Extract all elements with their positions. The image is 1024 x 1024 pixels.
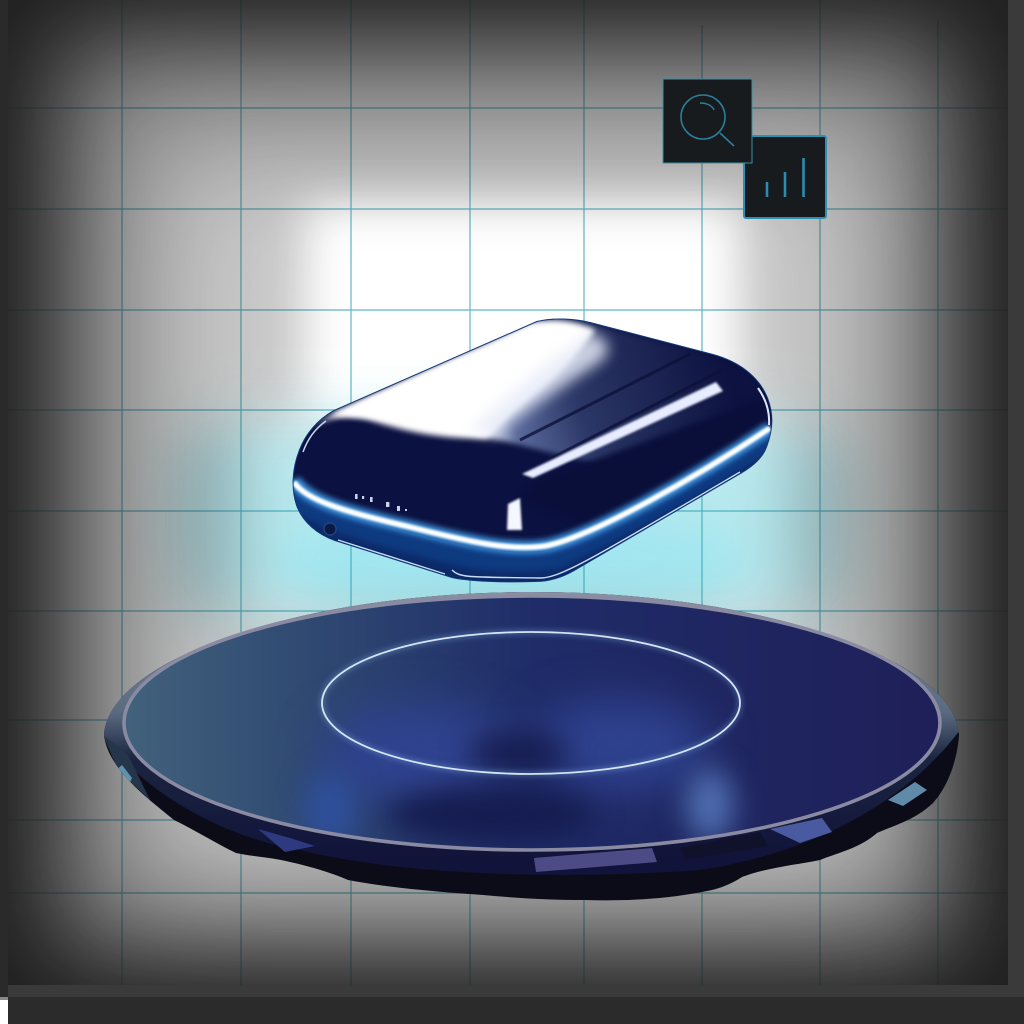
icon: bar chart tile: [744, 136, 826, 218]
soft reflection falloff: [470, 332, 608, 436]
glowing seam: [294, 428, 770, 547]
dark recess: [584, 398, 768, 474]
glowing seam glow: [294, 428, 770, 547]
body shading: [285, 315, 780, 585]
left edge highlight: [303, 421, 326, 452]
disc rim and underside: [100, 585, 965, 905]
platform disc: [100, 585, 965, 905]
floating device: [285, 315, 780, 590]
side specular highlight: [507, 498, 522, 530]
icon: magnifying glass tile: [663, 79, 752, 163]
top light bar: [522, 382, 723, 478]
disc lip highlight: [124, 596, 940, 850]
lower edge lines: [338, 472, 740, 578]
glowing inner ring: [322, 632, 740, 774]
indicator marks: [355, 494, 407, 511]
port: [324, 523, 336, 535]
device surfaces: [285, 315, 780, 590]
disc top surface: [120, 590, 950, 860]
bottom band: [290, 425, 775, 590]
top panel: [330, 320, 766, 470]
device outline: [294, 319, 771, 581]
right edge highlight: [758, 388, 769, 425]
ridge lines: [520, 354, 722, 460]
white reflection: [305, 320, 595, 438]
